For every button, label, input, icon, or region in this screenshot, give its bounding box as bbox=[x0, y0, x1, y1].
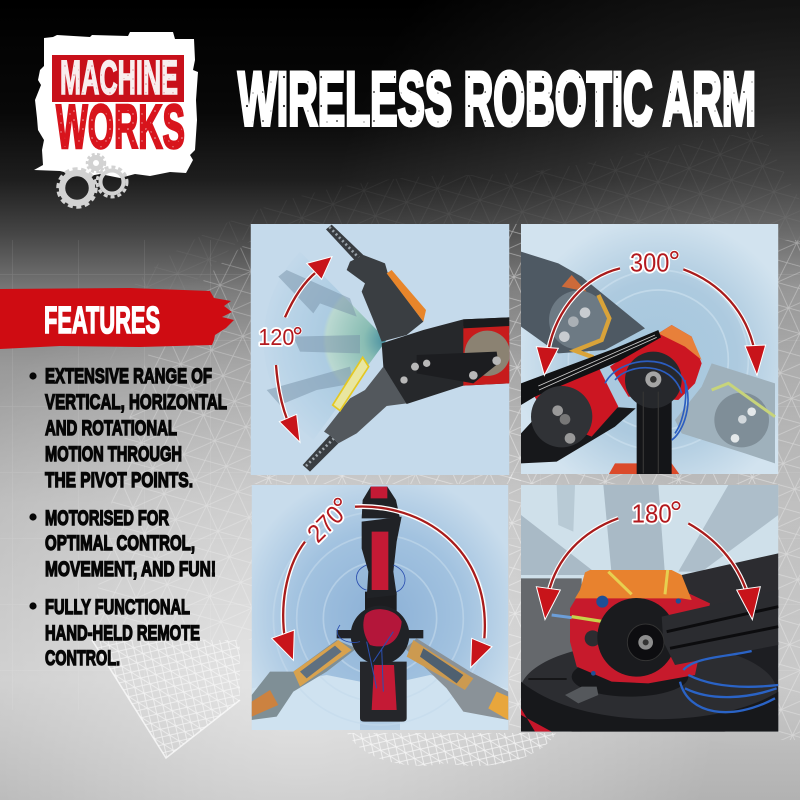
logo word WORKS: WORKS bbox=[56, 93, 185, 162]
logo gears bbox=[58, 154, 127, 207]
ghost arm left bbox=[521, 252, 645, 357]
feature 2: MOVEMENT, AND FUN! bbox=[45, 557, 216, 581]
robot arm bbox=[303, 225, 510, 472]
features list bbox=[29, 364, 227, 670]
feature 2: MOTORISED FOR bbox=[45, 506, 169, 530]
arrows bbox=[276, 257, 332, 442]
turntable base bbox=[521, 652, 778, 732]
feature 3: HAND-HELD REMOTE bbox=[45, 621, 200, 645]
label: 120 degrees: 120 bbox=[258, 324, 294, 350]
feature 1 bbox=[29, 364, 227, 492]
panel: 120 degree wrist motion bbox=[251, 224, 510, 475]
feature 2: OPTIMAL CONTROL, bbox=[45, 531, 195, 555]
arrows bbox=[536, 268, 766, 375]
label: 300 degrees: 300 bbox=[630, 248, 669, 278]
logo red plate bbox=[52, 55, 184, 102]
label: 180 degrees: 180 bbox=[632, 499, 672, 529]
features banner bbox=[0, 288, 234, 349]
logo torn paper backing bbox=[34, 32, 198, 178]
logo: Machine Works bbox=[34, 32, 198, 207]
main arm bbox=[521, 325, 702, 475]
ghost arm right bbox=[675, 363, 775, 463]
panel: 300 degree elbow motion bbox=[521, 224, 778, 475]
black arm and hub bbox=[597, 590, 778, 677]
banner heading: FEATURES bbox=[44, 300, 160, 342]
feature 3 bbox=[29, 595, 200, 670]
banner red brush stroke bbox=[0, 288, 234, 349]
blue wires bbox=[680, 651, 778, 712]
ghost arms behind bbox=[521, 485, 778, 575]
feature 3: FULLY FUNCTIONAL bbox=[45, 595, 190, 619]
feature 2 bbox=[29, 506, 216, 581]
ghost arm left bbox=[252, 640, 357, 720]
feature 1: EXTENSIVE RANGE OF bbox=[45, 364, 212, 388]
feature 3: CONTROL. bbox=[45, 646, 120, 670]
logo word MACHINE: MACHINE bbox=[60, 52, 178, 105]
arrows bbox=[272, 506, 492, 668]
label: 270 degrees: 270 bbox=[302, 501, 350, 548]
panel: 180 degree shoulder motion bbox=[520, 485, 778, 742]
feature 1: MOTION THROUGH bbox=[45, 442, 182, 466]
arrows bbox=[536, 518, 760, 620]
ghost arm right bbox=[405, 638, 508, 720]
feature 1: THE PIVOT POINTS. bbox=[45, 468, 193, 492]
feature 1: VERTICAL, HORIZONTAL bbox=[45, 390, 227, 414]
feature 1: AND ROTATIONAL bbox=[45, 416, 177, 440]
top-view arm and base bbox=[337, 487, 423, 722]
red shoulder block bbox=[552, 570, 710, 683]
panel: 270 degree base rotation bbox=[252, 485, 508, 730]
